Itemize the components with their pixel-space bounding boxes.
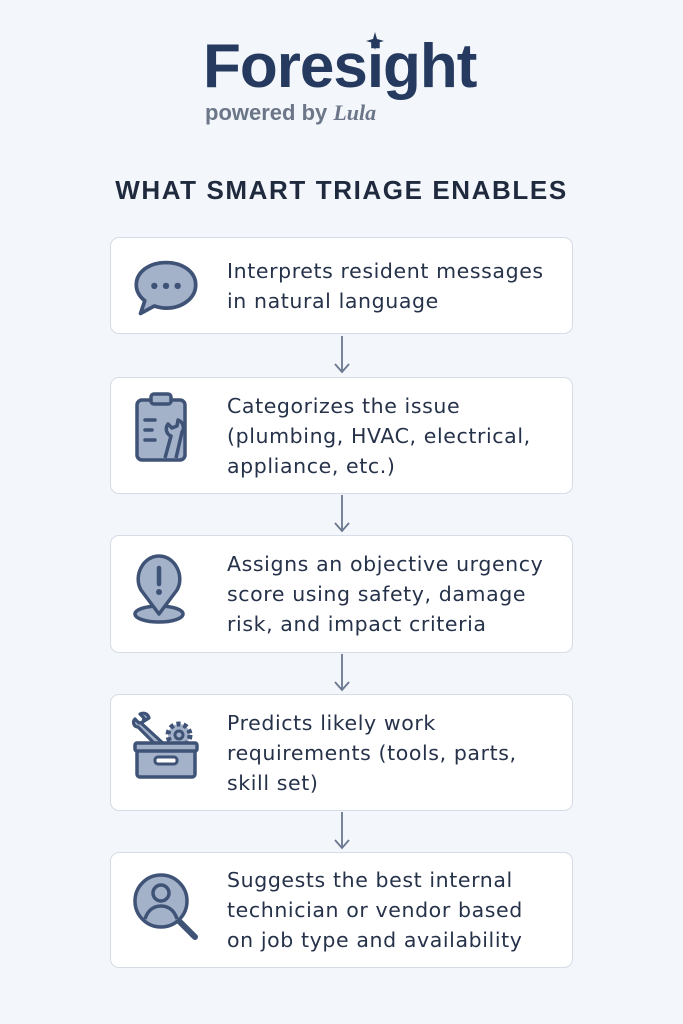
icon: toolbox <box>132 712 199 779</box>
card 1 <box>110 237 573 334</box>
card 1: in natural language <box>227 288 439 312</box>
card 2: appliance, etc.) <box>227 454 396 478</box>
card 5: Suggests the best internal <box>227 868 513 892</box>
icon: person search <box>133 873 198 940</box>
title: WHAT SMART TRIAGE ENABLES <box>115 175 568 205</box>
icon: clipboard with wrench <box>135 392 187 462</box>
card 4: skill set) <box>227 770 318 794</box>
icon: alert pin <box>133 554 185 624</box>
arrow 3 <box>334 654 350 692</box>
card 4 <box>110 694 573 811</box>
icon: chat bubble <box>134 260 198 316</box>
card 3 <box>110 535 573 653</box>
card 2: (plumbing, HVAC, electrical, <box>227 424 531 448</box>
logo: Foresight: powered by Lula <box>205 100 376 125</box>
icon: sparkle <box>366 32 384 50</box>
arrow 4 <box>334 812 350 850</box>
card 2 <box>110 377 573 494</box>
card 4: requirements (tools, parts, <box>227 740 517 764</box>
card 2: Categorizes the issue <box>227 394 460 418</box>
card 3: risk, and impact criteria <box>227 612 487 636</box>
card 3: score using safety, damage <box>227 582 526 606</box>
card 5 <box>110 852 573 968</box>
card 3: Assigns an objective urgency <box>227 552 543 576</box>
card 4: Predicts likely work <box>227 710 436 734</box>
arrow 2 <box>334 495 350 532</box>
logo: Foresight: Foresight <box>203 32 476 101</box>
card 1: Interprets resident messages <box>227 258 544 282</box>
card 5: technician or vendor based <box>227 898 523 922</box>
arrow 1 <box>334 336 350 374</box>
card 5: on job type and availability <box>227 928 522 952</box>
